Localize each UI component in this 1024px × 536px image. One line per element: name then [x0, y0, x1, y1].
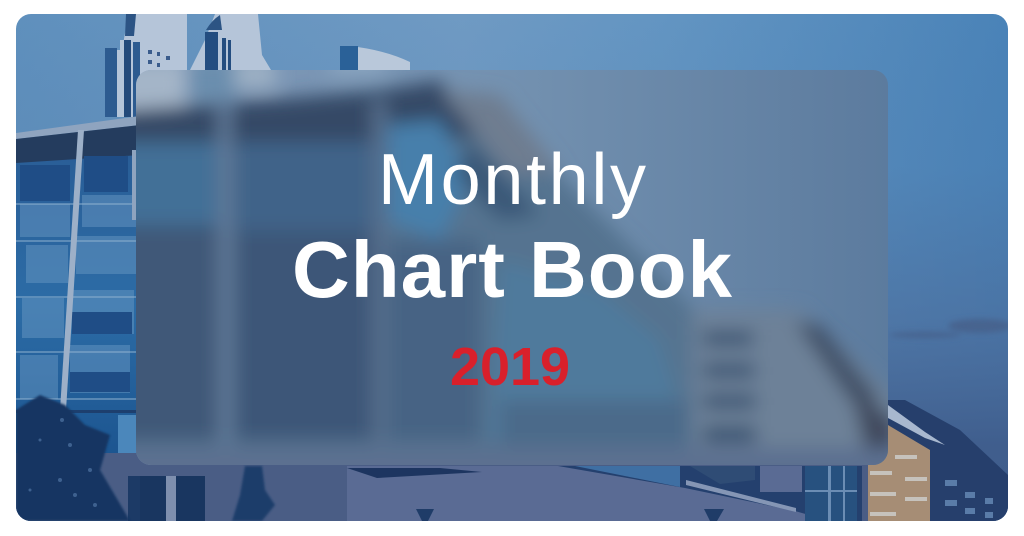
heading: Monthly: Monthly	[378, 140, 646, 220]
panel blurred background	[136, 70, 888, 465]
foreground tree left	[16, 395, 130, 521]
clouds	[889, 319, 1012, 338]
heading: Chart Book: Chart Book	[292, 225, 732, 314]
foreground tree center	[232, 466, 275, 521]
year: 2019	[450, 337, 570, 397]
distant buildings strip	[558, 466, 862, 521]
ground wall	[16, 453, 891, 521]
apartment buildings	[868, 400, 1008, 521]
tower right	[340, 46, 410, 70]
tower left	[105, 14, 187, 117]
street lamps	[416, 509, 724, 521]
tower middle	[190, 14, 271, 70]
main glass building	[16, 116, 141, 455]
frosted glass panel	[136, 70, 888, 465]
